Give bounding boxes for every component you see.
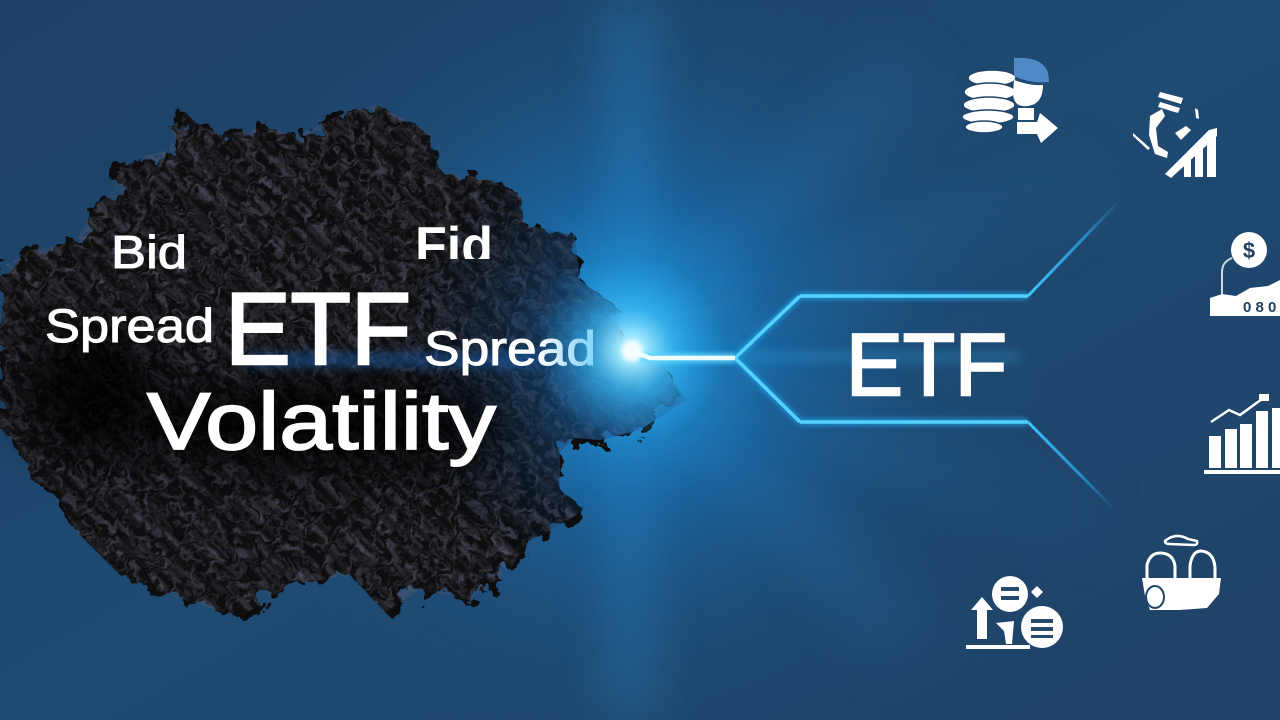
word: ETF centre: ETF <box>225 272 411 386</box>
icon: coins with up arrow <box>966 576 1063 649</box>
icon: dollar coin and pile <box>1210 232 1280 316</box>
dark rocky cluster <box>0 105 686 621</box>
word: Spread left: Spread <box>45 299 214 352</box>
word: Bid: Bid <box>111 226 187 278</box>
word: Spread right: Spread <box>424 323 596 376</box>
icon: bags <box>1142 536 1221 610</box>
light glow and rays <box>428 0 1022 720</box>
icon: dollar coin and pile: 0 8 0 <box>1243 299 1276 316</box>
word: glitched Fid: Fid <box>415 217 493 275</box>
icon: coins and person with arrow <box>962 58 1058 143</box>
branching light lines <box>537 198 1122 510</box>
word: Volatility: Volatility <box>147 377 497 467</box>
icon: dollar coin and pile: $ <box>1243 238 1255 263</box>
icon: globe fragments with rising bars <box>1133 92 1217 178</box>
label: ETF right: ETF <box>846 315 1007 414</box>
icon: bar chart with trend line <box>1204 394 1280 474</box>
rock texture <box>0 105 686 615</box>
